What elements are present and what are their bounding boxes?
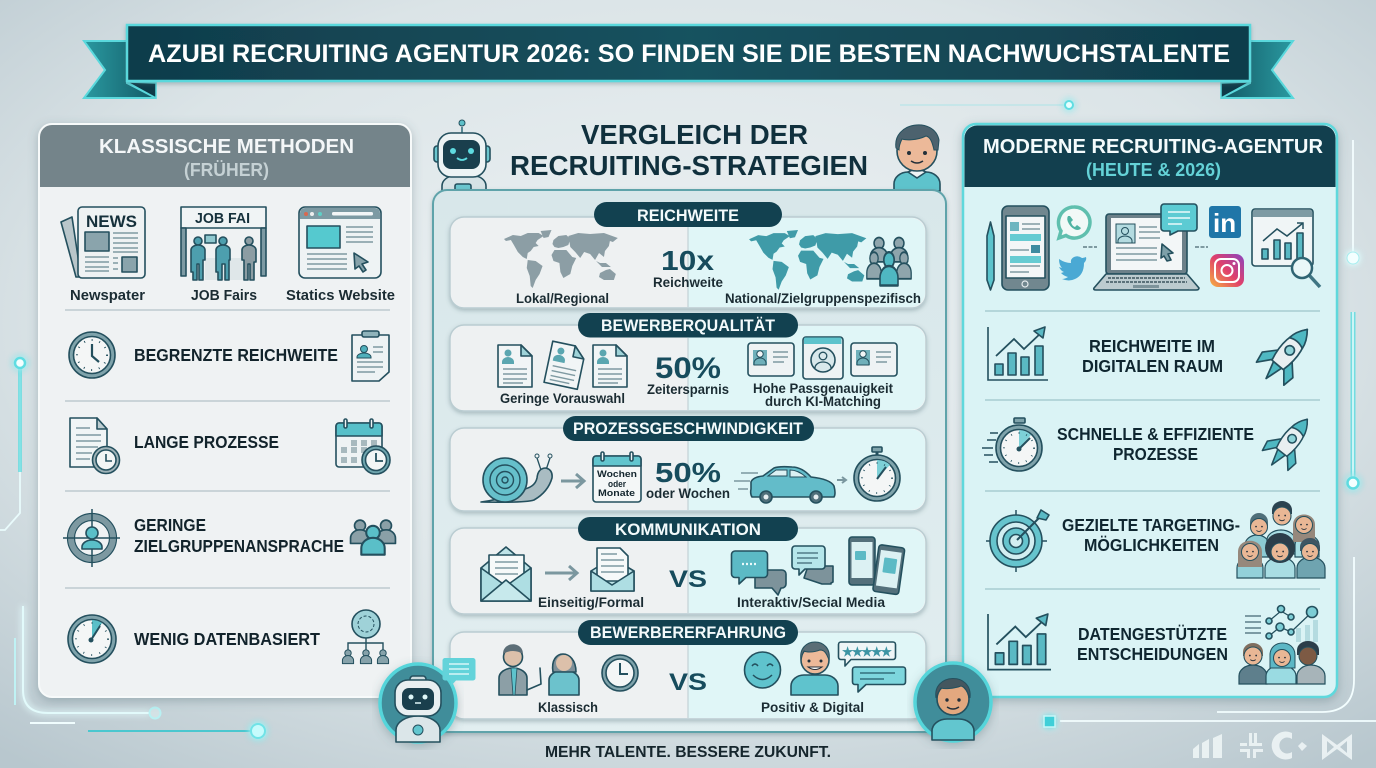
icon: stopwatch: [982, 418, 1042, 471]
center heading: RECRUITING-STRATEGIEN: [510, 150, 868, 181]
icon: gauge clock: [68, 615, 116, 663]
title: AZUBI RECRUITING AGENTUR 2026: SO FINDEN SIE DIE BESTEN NACHWUCHSTALENTE: [148, 40, 1230, 68]
pill heading: KOMMUNIKATION: [615, 521, 761, 539]
text block: [1057, 424, 1254, 464]
label left: Lokal/Regional: [516, 291, 609, 306]
pill heading: BEWERBERQUALITÄT: [601, 317, 775, 335]
icon: target person: [63, 509, 120, 567]
icon: document with clock: [70, 418, 120, 474]
row: wenig datenbasiert: WENIG DATENBASIERT: [134, 629, 320, 649]
label left: Geringe Vorauswahl: [500, 391, 625, 406]
icon: laptop: [1094, 214, 1199, 290]
row: lange Prozesse: LANGE PROZESSE: [134, 432, 279, 452]
panel: klassische Methoden: [39, 124, 411, 697]
stat: 10x: Reichweite: [653, 275, 723, 290]
icon: calendar: Wochen: [597, 469, 637, 480]
card background: [450, 217, 926, 308]
icon: chat bubble: [1161, 204, 1197, 235]
banner left tail: [84, 41, 156, 98]
footer logos: [1193, 731, 1352, 760]
icon: calendar: [593, 452, 641, 502]
panel heading: KLASSISCHE METHODEN: [99, 136, 354, 158]
card: Bewerbererfahrung: [450, 620, 926, 719]
panel background: [39, 124, 411, 697]
arrow: [545, 566, 577, 580]
icon: stopwatch: [854, 447, 900, 501]
card: Kommunikation: [450, 517, 926, 614]
label right: durch KI-Matching: [765, 394, 881, 409]
icon: newspaper: NEWS: [86, 213, 137, 231]
row: gezielte Targeting-Möglichkeiten: [986, 501, 1325, 578]
icon: job fair booth: JOB FAI: [195, 211, 250, 227]
label right: Interaktiv/Secial Media: [737, 595, 885, 610]
text block: ENTSCHEIDUNGEN: [1077, 644, 1228, 664]
card background: [450, 325, 926, 411]
text block: DATENGESTÜTZTE: [1078, 624, 1227, 644]
text block: [1082, 336, 1223, 376]
stat: 50%: Zeitersparnis: [647, 382, 729, 397]
stat: 50%: 50%: [655, 457, 721, 488]
pill heading: [594, 202, 782, 227]
card background: [450, 528, 926, 614]
icon: twitter bird: [1059, 256, 1086, 280]
text block: DIGITALEN RAUM: [1082, 356, 1223, 376]
icon: instagram: [1210, 254, 1244, 287]
panel: moderne Recruiting-Agentur: [963, 124, 1337, 697]
icon: robot mascot: [434, 120, 490, 192]
title banner: [84, 25, 1293, 98]
logo: cross arrows: [1322, 734, 1352, 760]
icon: smiley: [744, 652, 780, 688]
icon: chat bubbles: [732, 546, 833, 595]
label left: Klassisch: [538, 700, 598, 715]
icon labels: JOB Fairs: [191, 288, 257, 304]
label right: [753, 381, 893, 409]
icon: growth chart: [988, 327, 1048, 380]
icon: snail: [481, 454, 552, 502]
icon: rocket: [1251, 317, 1323, 391]
stat: 50%: oder Wochen: [646, 486, 730, 501]
text block: GERINGE: [134, 515, 206, 535]
panel: strategy comparison: [433, 190, 946, 732]
icon: group of people: [351, 520, 395, 555]
row: Reichweite im digitalen Raum: [988, 317, 1323, 391]
icon: rating bubble: ★★★★★: [842, 645, 893, 659]
icon: bullseye: [986, 510, 1049, 572]
pill heading: [578, 313, 798, 338]
stat: 50%: [647, 352, 729, 397]
center heading: VERGLEICH DER: [581, 119, 808, 150]
banner right tail: [1221, 41, 1293, 98]
avatar: robot: [380, 664, 456, 742]
text block: [134, 515, 344, 556]
icon: data network: [1245, 606, 1318, 642]
card: Bewerberqualität: [450, 313, 926, 411]
icons: resumes: [498, 341, 627, 389]
label right: National/Zielgruppenspezifisch: [725, 291, 921, 306]
connector dashes: [1083, 246, 1208, 248]
pill heading: REICHWEITE: [637, 207, 739, 225]
pill heading: [578, 620, 798, 645]
icon: linkedin: in: [1213, 208, 1236, 238]
text block: MÖGLICHKEITEN: [1084, 535, 1219, 555]
icon labels: Statics Website: [286, 288, 395, 304]
icon: open envelope: [481, 547, 531, 601]
icon: happy candidate: [791, 642, 838, 695]
icon: calendar with clock: [336, 419, 390, 474]
panel heading: [99, 136, 354, 180]
icon: target group: [867, 237, 911, 286]
icon: three people: [1239, 641, 1325, 684]
icon: job fair booth: [181, 207, 266, 280]
circuit decoration: left: [0, 358, 265, 738]
icon: diverse group: [1237, 501, 1325, 578]
card background: [450, 632, 926, 719]
icon: calendar: oder: [608, 479, 626, 490]
banner body: [127, 25, 1250, 81]
avatar: person: [915, 663, 991, 741]
circuit decoration: right: [900, 101, 1376, 727]
icon: org network: [342, 610, 389, 664]
label left: Einseitig/Formal: [538, 595, 644, 610]
icon: person mascot: [894, 125, 940, 191]
text block: PROZESSE: [1113, 444, 1198, 464]
icon: world map grey: [504, 230, 618, 288]
text block: REICHWEITE IM: [1089, 336, 1215, 356]
icon: clock: [69, 332, 115, 378]
icon labels: [70, 288, 395, 304]
logo: crescent: [1272, 731, 1307, 760]
row: wenig datenbasiert: [68, 610, 389, 664]
row: lange Prozesse: [70, 418, 390, 474]
icon: pen: [987, 222, 994, 290]
icon: envelope with letter: [591, 548, 634, 591]
icon: phones: [849, 537, 905, 595]
label right: Hohe Passgenauigkeit: [753, 381, 893, 396]
text block: [1062, 515, 1240, 555]
row: datengestützte Entscheidungen: [988, 606, 1325, 684]
icon: interview people: [499, 644, 579, 695]
icon: car: [734, 467, 835, 503]
row: schnelle Prozesse: [982, 408, 1322, 476]
icon: robot chat bubble: [442, 658, 476, 686]
icon: message bubble: [852, 667, 906, 692]
arrow: [561, 474, 584, 488]
row: begrenzte Reichweite: [69, 331, 389, 381]
icon: whatsapp: [1058, 207, 1090, 238]
tagline: MEHR TALENTE. BESSERE ZUKUNFT.: [545, 744, 831, 761]
icon: growth chart: [988, 614, 1051, 670]
icon labels: Newspater: [70, 288, 145, 304]
icon: newspaper: [61, 207, 145, 278]
stat: 50%: [646, 457, 730, 501]
pill heading: BEWERBERERFAHRUNG: [590, 624, 786, 642]
card: Prozessgeschwindigkeit: [450, 416, 926, 511]
icon: clipboard: [352, 331, 389, 381]
row: begrenzte Reichweite: BEGRENZTE REICHWEITE: [134, 345, 338, 365]
vs: VS: [669, 669, 707, 696]
stat: 10x: 10x: [661, 245, 714, 276]
icon: wall clock: [602, 655, 638, 691]
icon: rocket: [1257, 408, 1322, 476]
icon: static website: [299, 207, 381, 278]
panel header: [40, 125, 410, 187]
text block: ZIELGRUPPENANSPRACHE: [134, 536, 344, 556]
row: geringe Zielgruppenansprache: [63, 509, 395, 567]
logo: cross: [1240, 733, 1263, 758]
pill heading: [578, 517, 798, 541]
panel header: [964, 126, 1336, 187]
icon: world map teal: [749, 230, 866, 290]
card background: [450, 428, 926, 511]
panel heading: (FRÜHER): [184, 160, 269, 180]
vs: VS: [669, 566, 707, 593]
icon: calendar: Monate: [598, 488, 635, 499]
text block: GEZIELTE TARGETING-: [1062, 515, 1240, 535]
panel heading: [983, 136, 1324, 180]
pill heading: [563, 416, 814, 441]
icons: matched profiles: [748, 337, 897, 379]
panel heading: (HEUTE & 2026): [1086, 160, 1221, 180]
stat: 50%: 50%: [655, 352, 721, 385]
pill heading: PROZESSGESCHWINDIGKEIT: [573, 420, 803, 438]
label right: Positiv & Digital: [761, 700, 864, 715]
icon: linkedin: [1209, 206, 1241, 238]
text block: SCHNELLE & EFFIZIENTE: [1057, 424, 1254, 444]
icon: smartphone: [1002, 206, 1049, 290]
panel background: [963, 124, 1337, 697]
center heading: [510, 119, 868, 181]
panel heading: MODERNE RECRUITING-AGENTUR: [983, 136, 1324, 158]
card: Reichweite: [450, 202, 926, 308]
text block: [1077, 624, 1228, 664]
stat: 10x: [653, 245, 723, 290]
icon: analytics window with magnifier: [1252, 209, 1320, 287]
arrow: [837, 477, 846, 483]
icon: rating bubble: [838, 642, 896, 666]
logo: bars: [1193, 734, 1222, 758]
panel background: [433, 190, 946, 732]
